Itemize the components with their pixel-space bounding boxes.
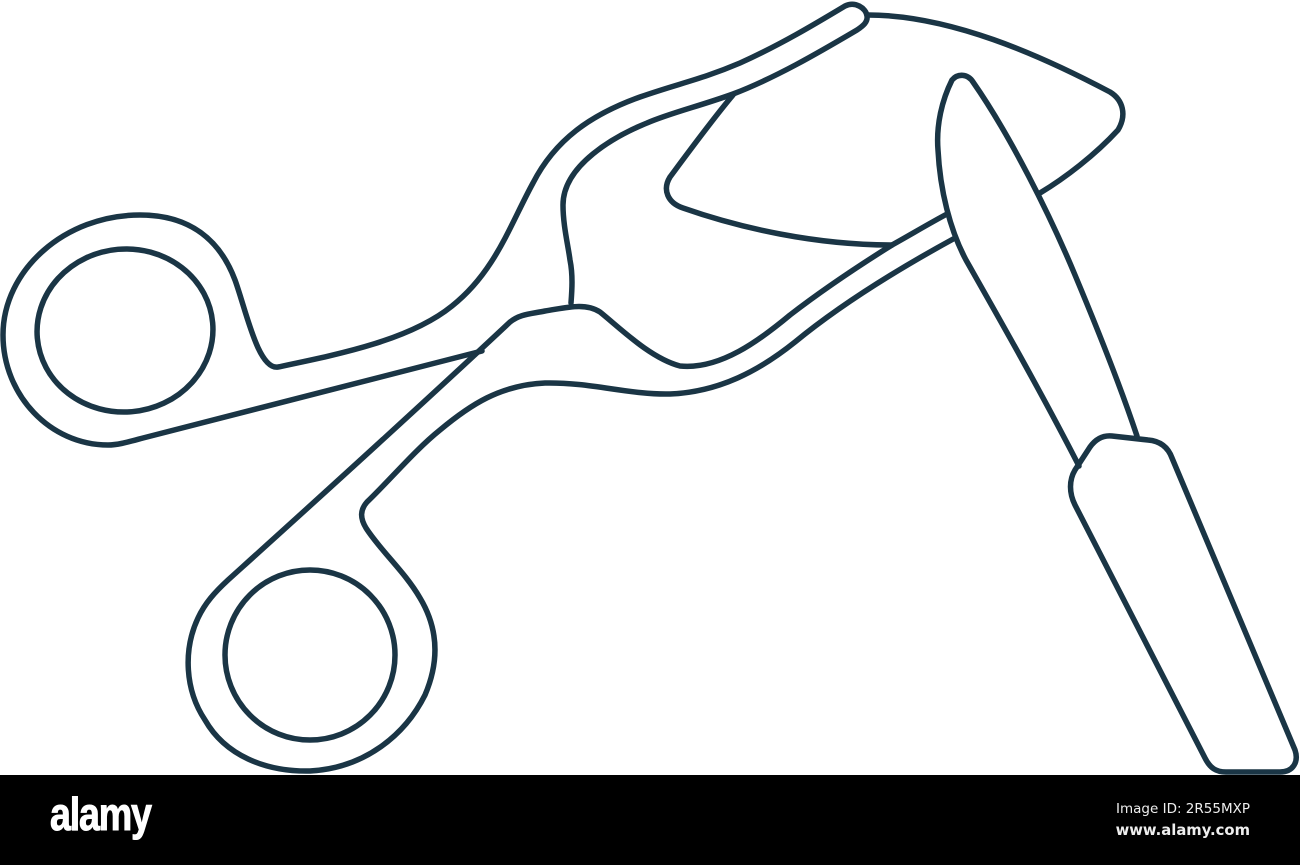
image id: Image ID: 2R55MXP bbox=[1116, 801, 1250, 817]
upper finger ring bbox=[30, 242, 220, 419]
logo: alamy wordmark: alamy bbox=[50, 788, 151, 840]
lower finger ring bbox=[225, 570, 395, 740]
footer: black watermark bar bbox=[0, 775, 1300, 865]
scalpel blade bbox=[938, 75, 1137, 466]
lower scissor handle and blade bbox=[188, 214, 955, 771]
website address: www.alamy.com bbox=[1116, 822, 1250, 839]
tissue being cut bbox=[666, 15, 1123, 245]
upper scissor handle and blade bbox=[3, 4, 867, 445]
scalpel handle bbox=[1070, 436, 1296, 772]
